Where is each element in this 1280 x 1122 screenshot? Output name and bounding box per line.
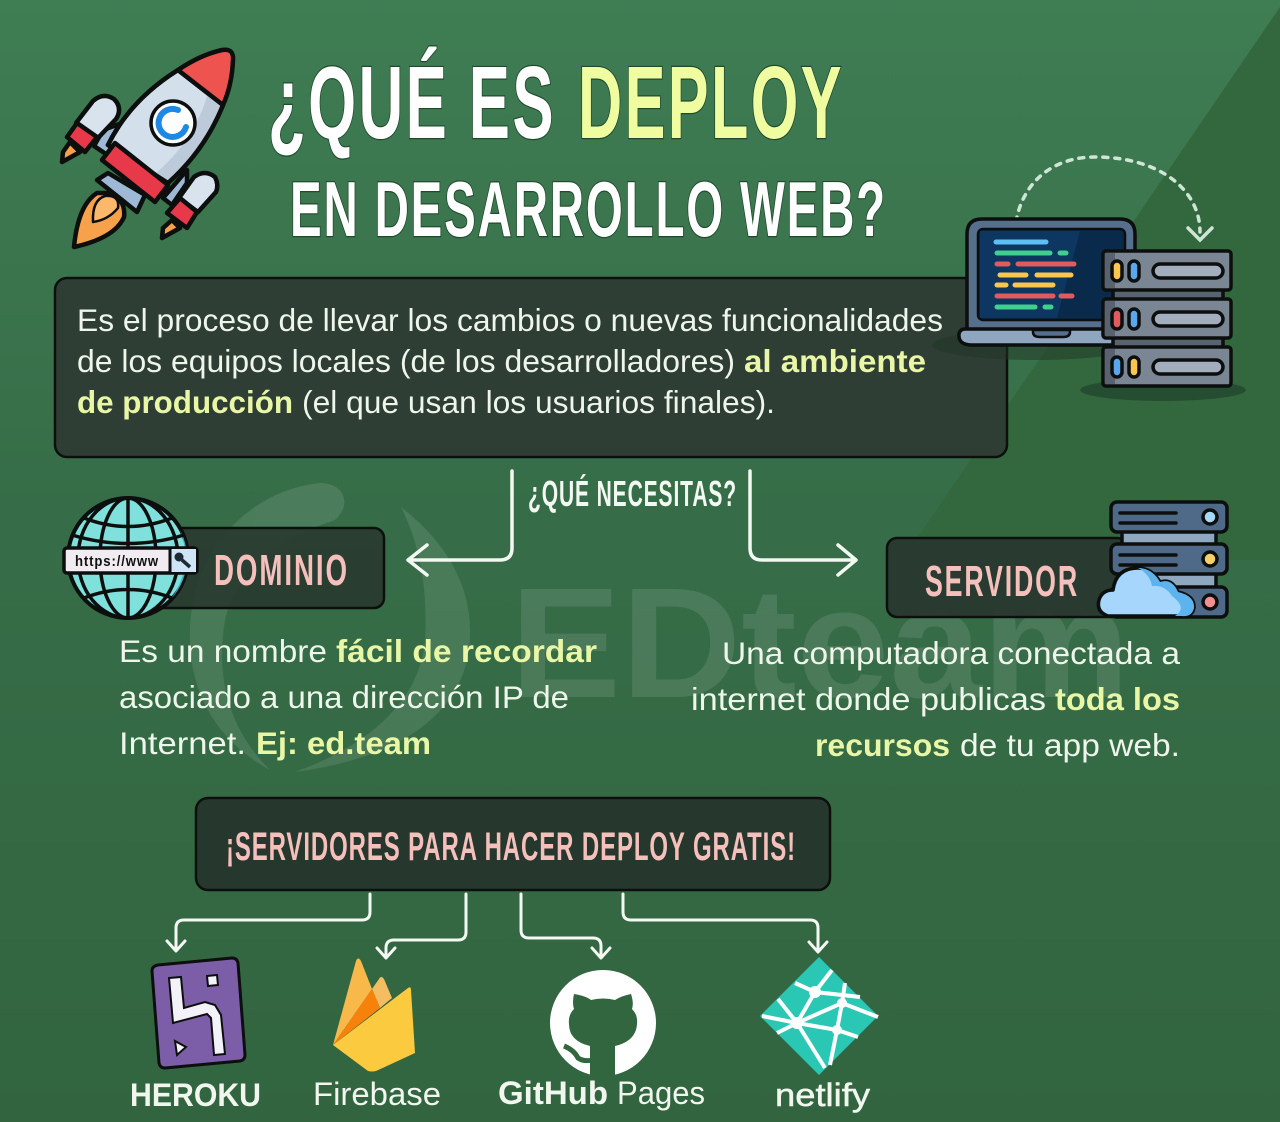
icon: rocket (62, 50, 233, 247)
text: servidor description: toda los (1055, 681, 1180, 717)
label: servidor: SERVIDOR (925, 557, 1079, 606)
logo: firebase: Firebase (313, 1076, 441, 1112)
logo: firebase (313, 958, 441, 1112)
panel: dominio (64, 498, 384, 618)
definition text: (el que usan los usuarios finales). (302, 384, 775, 420)
title: DEPLOY (578, 45, 844, 160)
fins (94, 122, 187, 212)
logo: heroku (130, 958, 261, 1113)
text: servidor description (691, 635, 1181, 763)
arrow: to github pages (521, 894, 610, 958)
body (108, 70, 223, 183)
text: dominio description: Internet. (119, 725, 246, 761)
text: dominio description: Es un nombre (119, 633, 327, 669)
lower booster (162, 220, 180, 238)
title: EN DESARROLLO WEB? (290, 165, 887, 253)
icon: globe with url bar (64, 498, 197, 618)
window (151, 101, 195, 145)
text: dominio description: asociado a una dirección IP de (119, 679, 569, 715)
text: servidor description: internet donde publicas (691, 681, 1046, 717)
logo: netlify: netlify (775, 1077, 870, 1113)
panel: free deploy servers heading: ¡SERVIDORES PARA HACER DEPLOY GRATIS! (226, 825, 796, 869)
label: dominio: DOMINIO (214, 546, 349, 595)
arrow: to heroku (167, 894, 370, 951)
icon: server with cloud (1098, 502, 1227, 617)
heading: ¿qué necesitas?: ¿QUÉ NECESITAS? (528, 473, 737, 514)
main flame (74, 193, 124, 247)
panel: free deploy servers heading (196, 798, 830, 890)
arrow: to netlify (623, 894, 827, 952)
icon: laptop deploying to server (932, 157, 1246, 401)
logo: heroku: HEROKU (130, 1077, 261, 1113)
text: servidor description: Una computadora conectada a (722, 635, 1181, 671)
definition text: de los equipos locales (de los desarrolladores) (77, 343, 735, 379)
logo: netlify (760, 957, 878, 1113)
nose (178, 50, 233, 105)
definition text: Es el proceso de llevar los cambios o nuevas funcionalidades (77, 302, 943, 338)
dashed arrow (1016, 157, 1212, 240)
watermark: EDteam logo (190, 483, 1130, 772)
definition text (77, 302, 943, 420)
logo: github pages: Pages (617, 1075, 705, 1111)
text: dominio description: Ej: ed.team (256, 725, 431, 761)
definition text: de producción (77, 384, 293, 420)
text: servidor description: de tu app web. (960, 727, 1180, 763)
arrow: to firebase (377, 894, 466, 958)
code lines (996, 242, 1074, 307)
red band (102, 143, 168, 202)
text: dominio description (119, 633, 597, 761)
arrow: to servidor (750, 471, 856, 575)
icon: globe with url bar: https://www (75, 553, 159, 570)
watermark: EDteam logo: EDteam (510, 556, 1130, 731)
text: dominio description: fácil de recordar (336, 633, 597, 669)
laptop (959, 219, 1135, 345)
definition text: al ambiente (744, 343, 926, 379)
upper booster (62, 142, 80, 162)
logo: github pages: GitHub (498, 1075, 608, 1111)
panel: definition (55, 278, 1007, 457)
title (268, 45, 887, 253)
arrow: to dominio (408, 471, 512, 575)
panel: servidor (887, 502, 1227, 617)
server rack (1103, 251, 1231, 386)
title: ¿QUÉ ES (268, 45, 556, 160)
text: servidor description: recursos (815, 727, 950, 763)
logo: github pages (498, 970, 705, 1111)
